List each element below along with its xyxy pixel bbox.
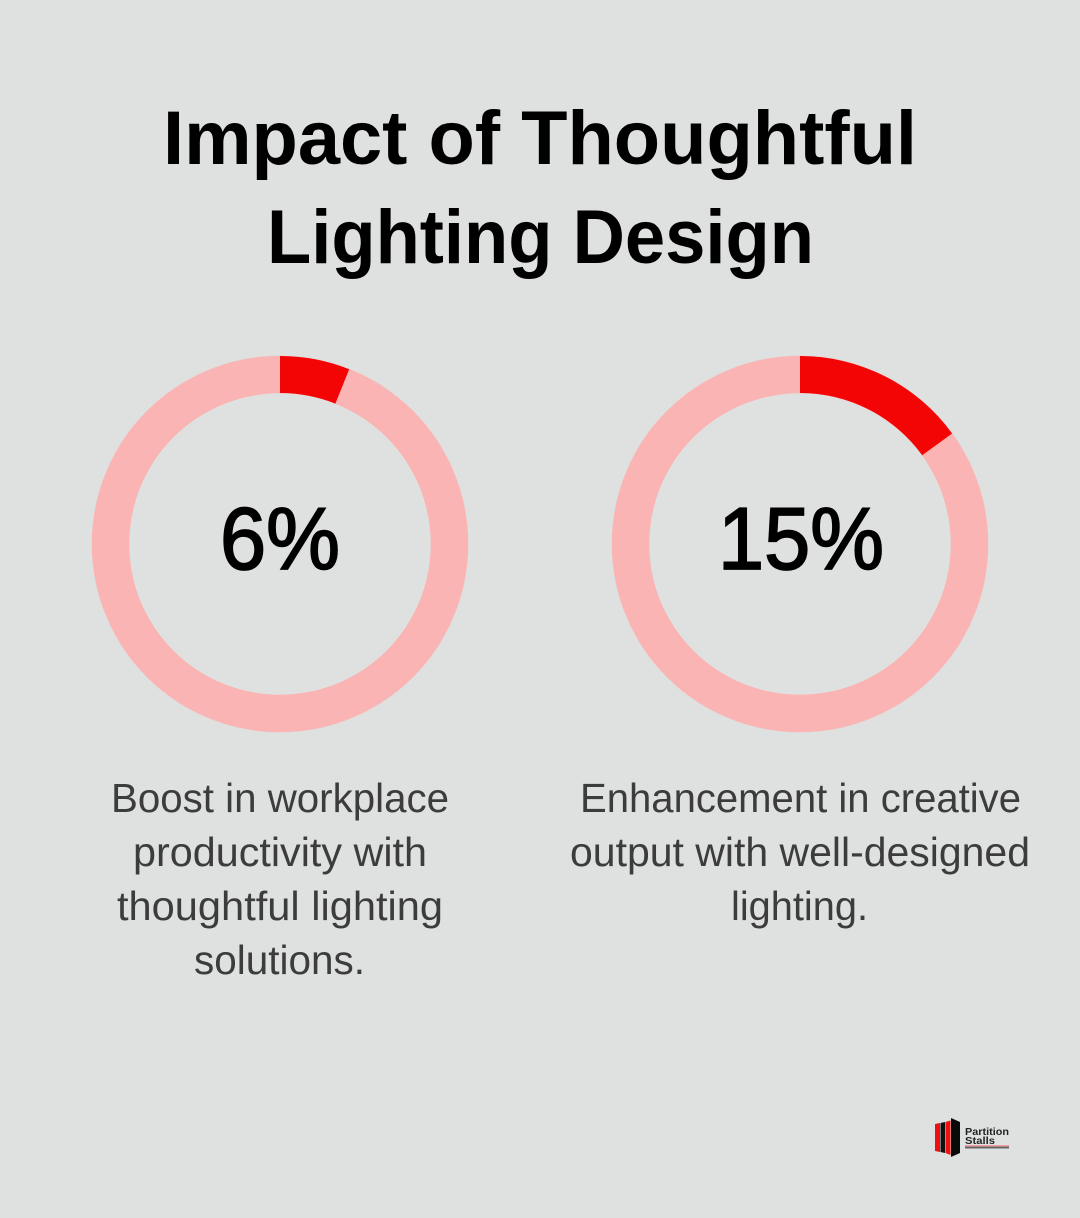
logo: Partition Stalls	[935, 1118, 1009, 1157]
description: workplace productivity: thoughtful lighting	[117, 883, 443, 929]
title: Lighting Design	[267, 195, 814, 280]
description: workplace productivity: solutions.	[194, 937, 365, 983]
value: 6%: 6%	[220, 489, 340, 588]
title: Impact of Thoughtful	[163, 96, 917, 181]
title	[163, 96, 917, 280]
icon: partition panels	[935, 1118, 960, 1157]
donut chart: 6%	[110, 356, 450, 714]
wordmark	[965, 1127, 1009, 1148]
description: workplace productivity	[111, 775, 449, 983]
description: creative output: output with well-designed	[570, 829, 1030, 875]
description: workplace productivity: productivity with	[133, 829, 427, 875]
wordmark: Stalls	[965, 1136, 995, 1147]
donut chart: 15%	[630, 356, 970, 714]
wordmark: Partition	[965, 1127, 1009, 1138]
description: creative output: Enhancement in creative	[580, 775, 1021, 821]
value: 15%: 15%	[718, 489, 884, 588]
panel: creative output stat	[570, 356, 1030, 929]
description: creative output: lighting.	[731, 883, 868, 929]
panel: workplace productivity stat	[110, 356, 450, 983]
description: creative output	[570, 775, 1030, 929]
description: workplace productivity: Boost in workplace	[111, 775, 449, 821]
